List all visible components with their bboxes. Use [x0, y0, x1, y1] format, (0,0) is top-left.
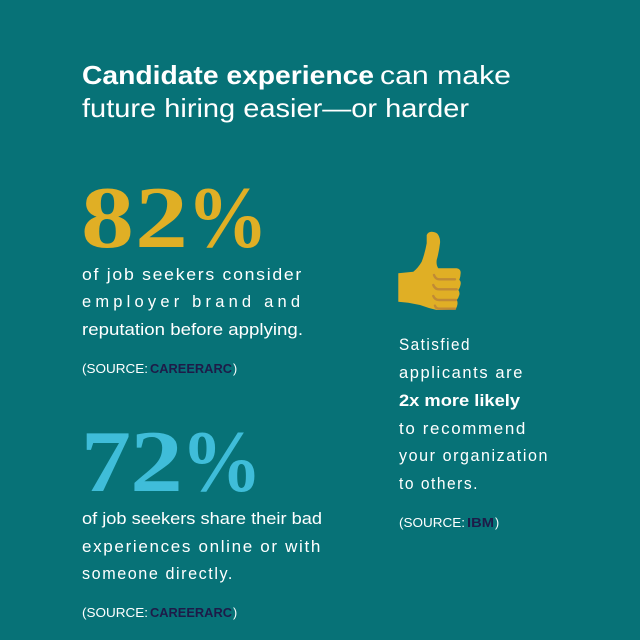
icon: thumbs up — [398, 232, 461, 310]
text block: employer brand: of job seekers consider — [82, 266, 303, 284]
panel: 82% statistic — [81, 170, 303, 376]
source: IBM: IBM — [467, 516, 494, 530]
source: CareerArc — [82, 606, 237, 620]
text block: employer brand — [82, 266, 303, 339]
source: CareerArc: CAREERARC — [150, 362, 232, 376]
text block: employer brand: employer brand and — [82, 293, 303, 311]
text block: satisfied applicants: to recommend — [399, 420, 527, 438]
text block: employer brand: reputation before applying. — [82, 321, 303, 339]
source: IBM: ) — [495, 516, 499, 530]
number: 72%: 2 — [130, 414, 183, 511]
text block: satisfied applicants — [399, 336, 549, 493]
number: 72%: % — [181, 414, 262, 511]
number: 82%: 8 — [81, 170, 134, 267]
source: CareerArc — [82, 362, 237, 376]
source: IBM — [399, 516, 499, 530]
source: CareerArc: ) — [233, 362, 237, 376]
text block: bad experiences: of job seekers share their bad — [82, 510, 322, 528]
title — [82, 60, 511, 123]
number: 82%: % — [187, 170, 268, 267]
text block: satisfied applicants: your organization — [399, 447, 549, 465]
text block: satisfied applicants: applicants are — [399, 364, 524, 382]
source: IBM: (SOURCE: — [399, 516, 465, 530]
number: 82%: 2 — [135, 170, 188, 267]
title: can make — [380, 60, 511, 90]
text block: satisfied applicants: to others. — [399, 475, 479, 493]
text block: bad experiences: someone directly. — [82, 565, 234, 583]
panel: 72% statistic — [81, 414, 322, 620]
title: Candidate experience — [82, 60, 374, 90]
source: CareerArc: CAREERARC — [150, 606, 232, 620]
title: future hiring easier—or harder — [82, 93, 469, 123]
text block: bad experiences — [82, 510, 322, 583]
source: CareerArc: (SOURCE: — [82, 606, 148, 620]
text block: satisfied applicants: Satisfied — [399, 336, 471, 354]
number: 72%: 7 — [81, 414, 131, 511]
text block: satisfied applicants: 2x more likely — [399, 392, 521, 410]
text block: bad experiences: experiences online or with — [82, 538, 322, 556]
source: CareerArc: (SOURCE: — [82, 362, 148, 376]
source: CareerArc: ) — [233, 606, 237, 620]
